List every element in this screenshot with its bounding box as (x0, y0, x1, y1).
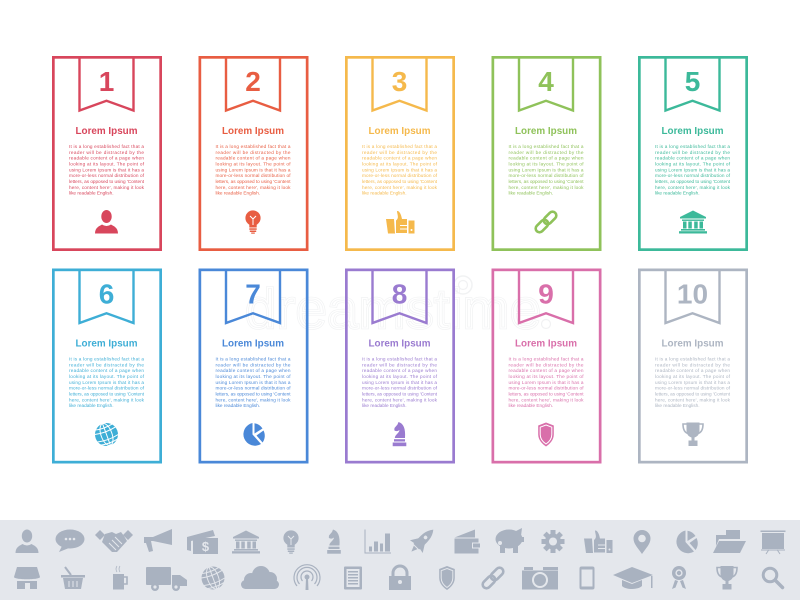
body text 6: here, content here', making it look (69, 397, 145, 402)
body text 9: using Lorem Ipsum is that it has a (508, 380, 584, 385)
body text 1: more-or-less normal distribution of (69, 173, 145, 178)
body text 4: reader will be distracted by the (508, 150, 584, 155)
heading 8: Lorem Ipsum (368, 338, 430, 350)
icon: trophy (683, 422, 703, 446)
heading 3: Lorem Ipsum (368, 126, 430, 137)
number 6: 6 (99, 278, 114, 309)
icon: document (344, 566, 362, 590)
icon: thumbs up (386, 211, 414, 234)
heading 10: Lorem Ipsum (662, 338, 724, 350)
icon: magnifier (763, 568, 782, 588)
icon: gear (542, 530, 564, 553)
icon: pie chart (243, 423, 265, 446)
body text 2: here, content here', making it look (216, 185, 291, 190)
number 3: 3 (392, 66, 407, 97)
icon: money: $ (202, 539, 210, 554)
body text 7: readable content of a page when (216, 368, 291, 373)
number 4: 4 (538, 66, 554, 97)
body text 4: like readable English. (508, 191, 553, 196)
body text 8: more-or-less normal distribution of (362, 386, 438, 391)
panel: card 6 (53, 270, 161, 462)
body text 6 (69, 356, 145, 408)
icon: person (16, 530, 38, 553)
icon: smartphone (580, 566, 594, 590)
body text 1: reader will be distracted by the (69, 150, 144, 155)
body text 2: letters, as opposed to using 'Content (216, 179, 291, 184)
body text 4: It is a long established fact that a (508, 144, 584, 149)
body text 5: readable content of a page when (655, 156, 730, 161)
body text 8: like readable English. (362, 403, 407, 408)
icon: shop (14, 567, 40, 589)
body text 10: here, content here', making it look (655, 397, 731, 402)
panel: card 1 (53, 57, 161, 250)
panel: card 8 (346, 270, 454, 462)
heading 5: Lorem Ipsum (662, 126, 724, 137)
ribbon 2 (226, 57, 280, 110)
body text 5: letters, as opposed to using 'Content (655, 179, 731, 184)
body text 9: readable content of a page when (508, 368, 584, 373)
ribbon 7 (226, 270, 280, 323)
icon: globe (92, 420, 121, 449)
body text 2: readable content of a page when (216, 156, 291, 161)
body text 2: reader will be distracted by the (216, 150, 291, 155)
body text 5: reader will be distracted by the (655, 150, 730, 155)
icon: rocket (405, 523, 440, 558)
body text 4: letters, as opposed to using 'Content (508, 179, 584, 184)
body text 1: looking at its layout. The point of (69, 162, 145, 166)
body text 10: letters, as opposed to using 'Content (655, 392, 731, 396)
icon: light bulb (283, 530, 299, 554)
body text 6: It is a long established fact that a (69, 356, 144, 362)
body text 3: reader will be distracted by the (362, 150, 437, 155)
icon: trophy (717, 566, 737, 590)
body text 10: It is a long established fact that a (655, 356, 730, 362)
body text 8: reader will be distracted by the (362, 362, 437, 367)
body text 2: It is a long established fact that a (216, 144, 291, 149)
body text 5: more-or-less normal distribution of (655, 173, 731, 178)
body text 8: readable content of a page when (362, 368, 437, 373)
body text 3: more-or-less normal distribution of (362, 173, 438, 178)
ribbon 3 (372, 57, 426, 110)
body text 4: more-or-less normal distribution of (508, 173, 584, 178)
body text 4: using Lorem Ipsum is that it has a (508, 167, 584, 172)
icon: handshake (95, 530, 133, 552)
icon: folder (713, 530, 746, 553)
body text 1: like readable English. (69, 191, 114, 196)
icon: map pin (634, 530, 650, 554)
heading 1: Lorem Ipsum (76, 126, 138, 137)
icon: bar chart (365, 530, 391, 553)
body text 6: letters, as opposed to using 'Content (69, 392, 145, 396)
body text 6: like readable English. (69, 403, 114, 408)
ribbon 5 (666, 57, 720, 110)
body text 5 (655, 144, 731, 196)
body text 1: here, content here', making it look (69, 185, 145, 190)
number 10: 10 (677, 278, 708, 309)
body text 1: letters, as opposed to using 'Content (69, 179, 145, 184)
icon: money (187, 530, 218, 554)
panel: card 5 (639, 57, 747, 250)
body text 1: It is a long established fact that a (69, 144, 144, 149)
body text 2: like readable English. (216, 191, 260, 196)
ribbon 9 (519, 270, 573, 323)
body text 10: more-or-less normal distribution of (655, 386, 731, 391)
body text 9: It is a long established fact that a (508, 356, 584, 362)
icon: globe (199, 563, 227, 593)
body text 3: like readable English. (362, 191, 407, 196)
ribbon 8 (372, 270, 426, 323)
body text 5: It is a long established fact that a (655, 144, 730, 149)
body text 10: like readable English. (655, 403, 700, 408)
body text 7: using Lorem Ipsum is that it has a (216, 380, 291, 385)
body text 3 (362, 144, 438, 196)
body text 1: readable content of a page when (69, 156, 144, 161)
body text 9: here, content here', making it look (508, 397, 584, 402)
icon: thumbs up (584, 530, 612, 553)
icon: chain link (481, 566, 505, 590)
body text 3: using Lorem Ipsum is that it has a (362, 167, 437, 172)
icon: shield (538, 422, 554, 446)
body text 3: letters, as opposed to using 'Content (362, 179, 438, 184)
panel: card 3 (346, 57, 454, 250)
body text 6: more-or-less normal distribution of (69, 386, 145, 391)
body text 5: like readable English. (655, 191, 700, 196)
icon: coffee cup (113, 566, 127, 590)
icon: wallet (454, 530, 480, 554)
icon: light bulb (245, 210, 261, 234)
icon: camera (522, 567, 558, 590)
body text 6: using Lorem Ipsum is that it has a (69, 380, 144, 385)
icon: person (95, 210, 118, 234)
icon: antenna (294, 565, 320, 590)
body text 7: letters, as opposed to using 'Content (216, 392, 291, 396)
icon: cloud (241, 566, 279, 589)
body text 4 (508, 144, 584, 196)
body text 10: looking at its layout. The point of (655, 374, 731, 379)
watermark: dreamstime (245, 277, 541, 340)
body text 9: reader will be distracted by the (508, 362, 584, 367)
number 1: 1 (99, 66, 114, 97)
body text 7: looking at its layout. The point of (216, 374, 291, 379)
body text 6: readable content of a page when (69, 368, 144, 373)
ribbon 6 (80, 270, 134, 323)
number 7: 7 (245, 278, 261, 309)
panel: card 4 (493, 57, 600, 250)
body text 4: looking at its layout. The point of (508, 162, 584, 166)
icon: pie chart (676, 530, 698, 553)
ribbon 1 (80, 57, 134, 110)
icon: award medal (672, 566, 686, 589)
ribbon 10 (666, 270, 720, 323)
icon: bank (232, 530, 260, 554)
icon: delivery truck (146, 567, 187, 591)
body text 10: readable content of a page when (655, 368, 730, 373)
body text 3: readable content of a page when (362, 156, 437, 161)
icon: piggy bank (496, 528, 524, 553)
body text 10 (655, 356, 731, 408)
body text 7: more-or-less normal distribution of (216, 386, 291, 391)
body text 10: reader will be distracted by the (655, 362, 730, 367)
number 8: 8 (392, 278, 407, 309)
body text 8: letters, as opposed to using 'Content (362, 392, 438, 396)
body text 1: using Lorem Ipsum is that it has a (69, 167, 144, 172)
ribbon 4 (519, 57, 573, 110)
body text 7: reader will be distracted by the (216, 362, 291, 367)
body text 8 (362, 356, 438, 408)
body text 8: here, content here', making it look (362, 397, 438, 402)
body text 2: looking at its layout. The point of (216, 162, 291, 166)
body text 10: using Lorem Ipsum is that it has a (655, 380, 730, 385)
heading 2: Lorem Ipsum (222, 126, 284, 137)
body text 2: more-or-less normal distribution of (216, 173, 291, 178)
icon: graduation cap (613, 567, 653, 589)
body text 2: using Lorem Ipsum is that it has a (216, 167, 291, 172)
body text 2 (216, 144, 291, 196)
icon: presentation board (760, 530, 786, 554)
watermark: dreamstime (245, 277, 541, 340)
icon: megaphone (144, 529, 172, 552)
body text 4: readable content of a page when (508, 156, 584, 161)
icon: chess knight (393, 422, 406, 446)
body text 9: more-or-less normal distribution of (508, 386, 584, 391)
body text 8: using Lorem Ipsum is that it has a (362, 380, 437, 385)
body text 7: here, content here', making it look (216, 397, 291, 402)
body text 9: letters, as opposed to using 'Content (508, 392, 584, 396)
body text 8: looking at its layout. The point of (362, 374, 438, 379)
heading 9: Lorem Ipsum (515, 338, 577, 350)
body text 6: looking at its layout. The point of (69, 374, 145, 379)
icon: chain link (534, 210, 558, 234)
body text 7 (216, 356, 291, 408)
body text 9: looking at its layout. The point of (508, 374, 584, 379)
body text 8: It is a long established fact that a (362, 356, 437, 362)
panel: icon band (0, 520, 800, 600)
body text 9 (508, 356, 584, 408)
body text 9: like readable English. (508, 403, 553, 408)
icon: bank (679, 210, 707, 234)
body text 3: It is a long established fact that a (362, 144, 437, 149)
icon: speech bubble (56, 530, 84, 552)
body text 7: like readable English. (216, 403, 260, 408)
body text 3: here, content here', making it look (362, 185, 438, 190)
heading 4: Lorem Ipsum (515, 126, 577, 137)
heading 7: Lorem Ipsum (222, 338, 284, 350)
number 2: 2 (245, 66, 261, 97)
body text 5: using Lorem Ipsum is that it has a (655, 167, 730, 172)
body text 4: here, content here', making it look (508, 185, 584, 190)
body text 6: reader will be distracted by the (69, 362, 144, 367)
number 5: 5 (685, 66, 700, 97)
body text 5: here, content here', making it look (655, 185, 731, 190)
icon: shield (439, 566, 455, 590)
icon: chess knight (327, 530, 341, 554)
body text 3: looking at its layout. The point of (362, 162, 438, 166)
body text 5: looking at its layout. The point of (655, 162, 731, 166)
panel: card 2 (200, 57, 307, 250)
icon: padlock (389, 566, 411, 590)
body text 7: It is a long established fact that a (216, 356, 291, 362)
panel: card 10 (639, 270, 747, 462)
heading 6: Lorem Ipsum (76, 338, 138, 350)
icon: basket (61, 567, 85, 589)
panel: card 9 (493, 270, 600, 462)
number 9: 9 (538, 278, 554, 309)
body text 1 (69, 144, 145, 196)
panel: card 7 (200, 270, 307, 462)
